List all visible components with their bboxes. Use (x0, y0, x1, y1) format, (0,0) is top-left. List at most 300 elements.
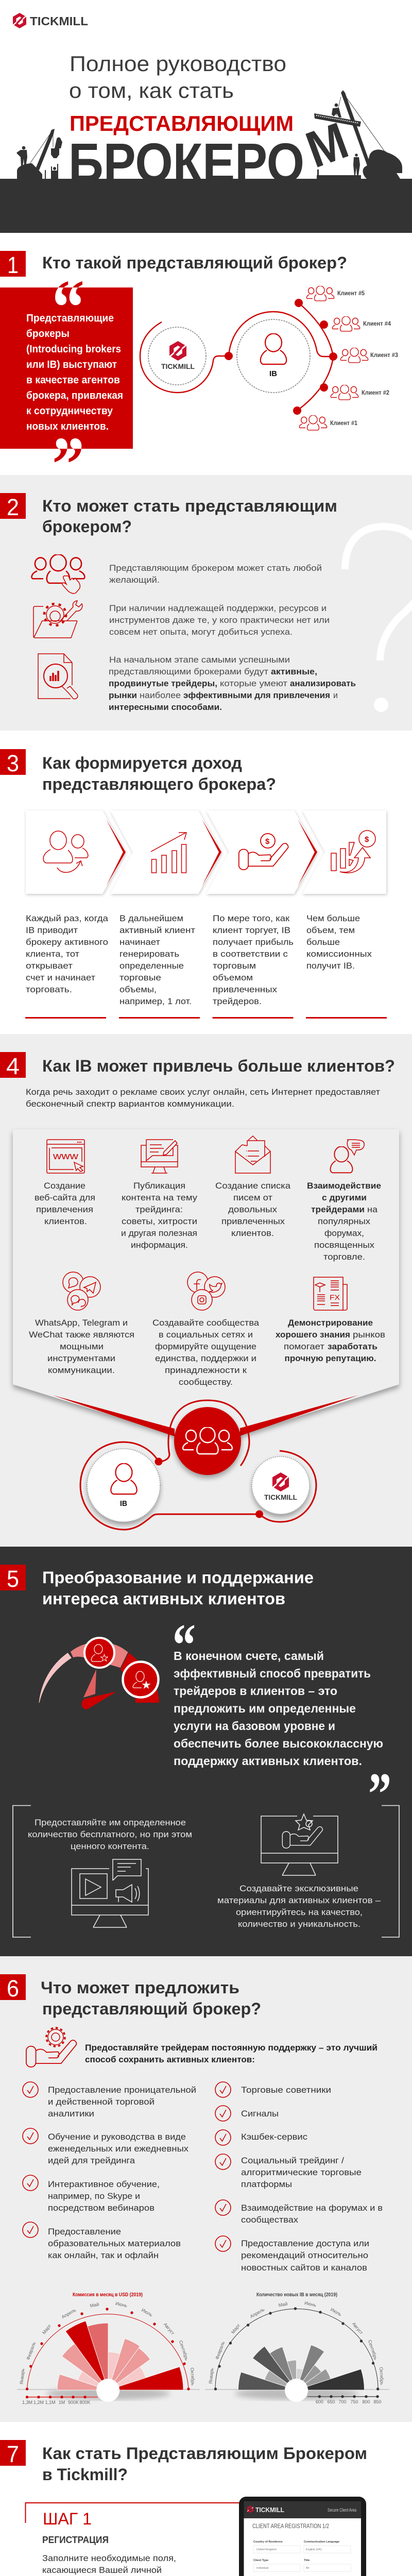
icon: email list (235, 1136, 270, 1173)
text: publishing: советы, хитрости (122, 1216, 197, 1226)
big question mark (345, 527, 412, 712)
right crane silhouette (314, 90, 402, 179)
text column 3: трейдеров. (213, 996, 262, 1006)
text column 1: торговать. (26, 985, 72, 994)
text: market knowledge: хорошего знания (276, 1330, 350, 1340)
heading 4: Как IB может привлечь больше клиентов? (42, 1057, 395, 1075)
checklist right: рекомендаций относительно (241, 2250, 368, 2260)
heading 5: 5 (7, 1566, 19, 1592)
title: Полное руководство (70, 52, 286, 76)
text column 3: в соответствии с (213, 949, 288, 959)
text: exclusive materials: ориентируйтесь на качество, (236, 1907, 363, 1917)
quote: retain traders: поддержку активных клиентов. (174, 1754, 362, 1768)
chart: commission per month: 900K (68, 2400, 79, 2405)
icon: hand with coin (239, 834, 288, 870)
checklist left: Предоставление проницательной (48, 2085, 196, 2095)
text column 1: счет и начинает (26, 973, 95, 982)
panel: definition quote: брокеры (26, 328, 70, 340)
text: email list: писем от (233, 1193, 272, 1202)
tablet: registration form: United Kingdom (256, 2548, 277, 2551)
text: market knowledge: заработать (328, 1342, 377, 1351)
diagram: clients, IB and tickmill: IB (120, 1499, 127, 1508)
text: free content: количество бесплатного, но при этом (28, 1829, 192, 1839)
diagram: tickmill, IB and clients (140, 286, 398, 430)
text: interact with traders: форумах, (324, 1228, 364, 1238)
icon: hand with gear (26, 2028, 76, 2067)
tablet: registration form: English (UK) (306, 2548, 322, 2551)
text: market knowledge: Демонстрирование (288, 1318, 373, 1328)
tablet: registration form: TICKMILL (255, 2506, 284, 2514)
text: messengers: мощными (60, 1342, 104, 1351)
chart: commission per month: Комиссия в месяц в USD (2019) (73, 2292, 143, 2298)
section 6 (0, 1956, 412, 2422)
text: interact with traders: на (367, 1205, 378, 1214)
text: interact with traders: торговле. (323, 1252, 365, 1262)
icon: bars, arrow and coin: $ (365, 835, 369, 844)
chevron cards (26, 810, 386, 894)
heading 3: представляющего брокера? (42, 775, 276, 793)
text: active advanced traders (109, 655, 356, 712)
chart: new IBs per month: 750 (350, 2399, 358, 2404)
step 1: РЕГИСТРАЦИЯ (42, 2535, 109, 2545)
text: active advanced traders: наиболее (140, 690, 181, 700)
checklist right: Взаимодействие на форумах и в (241, 2203, 383, 2213)
chart: commission per month: 1,2M (33, 2400, 44, 2405)
chart: commission per month: Сентябрь (178, 2340, 190, 2361)
intro text (26, 1087, 380, 1109)
chart: new IBs per month: 850 (373, 2399, 382, 2404)
title: о том, как стать (69, 78, 234, 103)
quote: retain traders: предложить им определенные (174, 1702, 356, 1715)
checklist right: Торговые советники (241, 2085, 331, 2095)
checklist right (215, 2082, 383, 2273)
panel: definition quote (0, 281, 133, 463)
panel: definition quote: брокера, привлекая (26, 390, 123, 401)
text: website: веб-сайта для (35, 1193, 95, 1202)
intro text: бесконечный спектр вариантов коммуникации. (26, 1099, 234, 1109)
heading 7: Как стать Представляющим Брокером (42, 2444, 367, 2463)
text: email list: Создание списка (215, 1181, 291, 1191)
text: publishing: и другая полезная (121, 1228, 197, 1238)
tablet: registration form: CLIENT AREA REGISTRATION 1/2 (252, 2522, 329, 2530)
checklist left: и действенной торговой (48, 2097, 154, 2107)
checklist left: Предоставление (48, 2227, 121, 2236)
text column 3 (212, 913, 294, 1019)
checklist left: идей для трейдинга (48, 2156, 135, 2165)
section 1 (0, 251, 398, 463)
text: social networks: формируйте ощущение (155, 1342, 256, 1351)
text: email list (215, 1181, 291, 1238)
heading 2: Кто может стать представляющим (42, 497, 337, 515)
chart: commission per month: 1M (59, 2400, 65, 2405)
text: support and tools: При наличии надлежащей поддержки, ресурсов и (109, 603, 327, 613)
diagram: tickmill, IB and clients: IB (269, 369, 277, 378)
text: email list: довольных (228, 1205, 278, 1214)
panel: definition quote: “ (52, 264, 84, 351)
text: anyone can become IB: Представляющим брокером может стать любой (109, 563, 322, 573)
text column 2: генерировать (119, 949, 179, 959)
chart: commission per month: Февраль (25, 2341, 37, 2361)
icon: social networks (187, 1272, 225, 1310)
heading 2: 2 (7, 494, 19, 520)
quote: retain traders: ” (368, 1760, 391, 1827)
text column 3: объемом (213, 973, 253, 982)
chart: new IBs per month: Количество новых IB в месяц (2019) (256, 2292, 337, 2298)
step 1: касающиеся Вашей личной (42, 2565, 162, 2575)
text column 2: объемы, (119, 985, 157, 994)
checklist left: еженедельных или ежедневных (48, 2144, 189, 2154)
checklist right: Сигналы (241, 2109, 279, 2119)
chart: commission per month: Май (90, 2302, 99, 2309)
checklist left (23, 2082, 196, 2260)
text: interact with traders: трейдерами (311, 1205, 365, 1214)
text column 3: привлеченных (213, 985, 278, 994)
text column 3: получает прибыль (213, 937, 294, 947)
quote: retain traders: “ (173, 1612, 196, 1679)
callout: support: Предоставляйте трейдерам постоянную поддержку – это лучший (85, 2043, 377, 2053)
icon: people with pointer (32, 554, 84, 594)
checklist right: сообществах (241, 2215, 299, 2225)
icon: trader with chat bubble (330, 1140, 364, 1173)
text column 4: Чем больше (306, 913, 360, 923)
text: anyone can become IB: желающий. (109, 575, 160, 585)
icon: gear and folder (33, 601, 82, 638)
text column 1: брокеру активного (26, 937, 108, 947)
text: messengers (29, 1318, 134, 1375)
panel: definition quote: ” (52, 421, 84, 509)
diagram: tickmill, IB and clients: Клиент #2 (362, 389, 389, 396)
text column 4: комиссионных (306, 949, 372, 959)
text: email list: привлеченных (221, 1216, 285, 1226)
diagram: clients, IB and tickmill: TICKMILL (264, 1493, 297, 1501)
text: exclusive materials: количество и уникальность. (238, 1919, 360, 1929)
text: active advanced traders: На начальном этапе самыми успешными (109, 655, 290, 665)
text column 1 (25, 913, 109, 1019)
checklist right: Социальный трейдинг / (241, 2156, 344, 2165)
icon: monitor with media (72, 1859, 148, 1927)
title: ПРЕДСТАВЛЯЮЩИМ (70, 111, 294, 135)
chart: new IBs per month: 600 (316, 2399, 323, 2404)
gauge with client icons (39, 1638, 159, 1709)
checklist left: как онлайн, так и офлайн (48, 2250, 159, 2260)
diagram: tickmill, IB and clients: Клиент #1 (330, 419, 357, 427)
panel: definition quote: или IB) выступают (26, 359, 117, 370)
heading 6: 6 (7, 1975, 19, 2002)
icon: website (47, 1140, 84, 1173)
text: messengers: коммуникации. (48, 1365, 115, 1375)
quote: retain traders (173, 1612, 391, 1827)
title: БРОКЕРО (68, 131, 304, 194)
chart: new IBs per month: Апрель (249, 2307, 265, 2319)
icon: report under magnifier (38, 654, 78, 699)
heading 6: представляющий брокер? (42, 1999, 261, 2018)
title (68, 52, 355, 194)
text column 2: начинает (119, 937, 160, 947)
heading 4: 4 (6, 1053, 20, 1079)
icon: messengers (63, 1272, 100, 1310)
text column 1: открывает (26, 961, 73, 971)
title: М (299, 111, 355, 179)
heading 5: интереса активных клиентов (42, 1589, 285, 1608)
checklist right: новостных сайтов и каналов (241, 2263, 367, 2273)
panel background (0, 475, 412, 731)
text: exclusive materials: материалы для активных клиентов – (217, 1895, 381, 1905)
checklist left: образовательных материалов (48, 2239, 181, 2248)
diagram: tickmill, IB and clients: Клиент #4 (363, 320, 391, 327)
checklist left: аналитики (48, 2109, 94, 2119)
icon: website: www (53, 1151, 79, 1161)
panel: definition quote: к сотрудничеству (26, 405, 113, 417)
chart: commission per month (17, 2292, 200, 2405)
text column 3: клиент торгует, IB (213, 925, 290, 935)
panel background (0, 1956, 412, 2422)
text: social networks: в социальных сетях и (159, 1330, 253, 1340)
tablet: registration form: Client Type (253, 2559, 268, 2562)
chart: commission per month: Июнь (115, 2301, 128, 2308)
text: active advanced traders: активные, (271, 667, 317, 676)
icon: hand with coin: $ (265, 837, 270, 846)
ground (0, 179, 412, 233)
text column 2: активный клиент (119, 925, 195, 935)
chart: commission per month: Январь (19, 2368, 25, 2385)
tablet: registration form: Communication Language (304, 2540, 339, 2544)
icon: fx newspaper: FX (330, 1293, 340, 1301)
chart: commission per month: 1,1M (45, 2400, 56, 2405)
checklist left: посредством вебинаров (48, 2203, 154, 2213)
text: email list: клиентов. (231, 1228, 274, 1238)
text: market knowledge (276, 1318, 385, 1363)
gauge with client icons: ★ (100, 1654, 108, 1663)
text: social networks: сообществу. (179, 1377, 233, 1387)
text: anyone can become IB (109, 563, 322, 585)
heading 7: в Tickmill? (42, 2465, 128, 2484)
callout: support: способ сохранить активных клиентов: (85, 2055, 255, 2064)
icon: two clients (43, 831, 88, 872)
text: website: клиентов. (44, 1216, 87, 1226)
logo (12, 13, 88, 28)
text: active advanced traders: продвинутые трейдеры, (109, 679, 217, 688)
chart: new IBs per month: Май (278, 2301, 288, 2308)
tablet: registration form: Title (304, 2559, 310, 2562)
panel: definition quote: “ (52, 264, 84, 351)
heading 6: Что может предложить (41, 1978, 239, 1997)
text: active advanced traders: представляющими брокерами будут (109, 667, 268, 676)
heading 5 (0, 1565, 314, 1608)
chart: commission per month: 1,3M (22, 2400, 32, 2405)
text: social networks (152, 1318, 260, 1387)
text: market knowledge: помогает (284, 1342, 324, 1351)
left crane silhouette (16, 129, 62, 179)
text: publishing: информация. (131, 1240, 188, 1250)
checklist left: Обучение и руководства в виде (48, 2132, 186, 2142)
quote: retain traders: трейдеров в клиентов – это (174, 1684, 337, 1698)
heading 5: Преобразование и поддержание (42, 1568, 314, 1587)
section 4 (0, 1034, 412, 1547)
tablet: registration form: Country of Residence (253, 2540, 283, 2544)
chart: commission per month: Октябрь (190, 2367, 196, 2386)
text column 1: Каждый раз, когда (26, 913, 109, 923)
heading 2: брокером? (42, 517, 132, 536)
text column 2: торговые (119, 973, 161, 982)
chart: new IBs per month: Июнь (304, 2300, 317, 2308)
text: market knowledge: рынков (353, 1330, 385, 1340)
chart: new IBs per month: Июль (330, 2307, 342, 2317)
heading 6 (0, 1974, 261, 2018)
text: messengers: WeChat также являются (29, 1330, 134, 1340)
text column 2: В дальнейшем (119, 913, 183, 923)
gauge with client icons: ★ (142, 1680, 151, 1690)
text: website: Создание (44, 1181, 85, 1191)
checklist left: Интерактивное обучение, (48, 2179, 160, 2189)
icon: monitor with award hand (261, 1814, 338, 1875)
text: market knowledge: прочную репутацию. (284, 1353, 376, 1363)
text: free content (28, 1818, 192, 1851)
panel: definition quote: (Introducing brokers (26, 344, 121, 355)
text column 2: например, 1 лот. (119, 996, 192, 1006)
icon: publishing (141, 1140, 178, 1173)
heading 3 (0, 749, 276, 793)
panel background (0, 1034, 412, 1547)
chart: new IBs per month: Сентябрь (367, 2339, 379, 2361)
text column 4: больше (306, 937, 340, 947)
heading 3: Как формируется доход (42, 754, 242, 772)
chart: new IBs per month: Январь (208, 2368, 214, 2384)
icon: bars, arrow and coin (331, 831, 375, 873)
chart: new IBs per month: 650 (327, 2399, 335, 2404)
chart: commission per month: Март (41, 2324, 52, 2335)
header (0, 13, 412, 233)
text: exclusive materials: Создавайте эксклюзивные (239, 1884, 358, 1893)
diagram: tickmill, IB and clients: TICKMILL (161, 362, 195, 370)
tablet: registration form: Secure Client Area (328, 2507, 356, 2513)
text: messengers: инструментами (47, 1353, 115, 1363)
text: website: привлечения (36, 1205, 93, 1214)
heading 1: 1 (7, 252, 19, 278)
text: interact with traders (307, 1181, 381, 1262)
chart: new IBs per month: Март (230, 2323, 241, 2335)
tablet: registration form: Mr (306, 2567, 310, 2570)
text: support and tools: инструментов даже те, у кого практически нет или (109, 615, 330, 625)
text column 2 (119, 913, 200, 1019)
chart: commission per month: Август (163, 2321, 176, 2336)
icon: growing bars (151, 833, 186, 873)
quote: retain traders: услуги на базовом уровне и (174, 1719, 335, 1733)
section 3 (0, 749, 387, 1019)
text column 4: объем, тем (306, 925, 355, 935)
checklist right: Предоставление доступа или (241, 2239, 369, 2248)
step 1: Заполните необходимые поля, (42, 2553, 176, 2563)
chart: new IBs per month: Октябрь (379, 2367, 385, 2385)
text column 2: определенные (119, 961, 184, 971)
panel: definition quote: в качестве агентов (26, 375, 120, 386)
chart: commission per month: Апрель (61, 2307, 77, 2319)
text: publishing (121, 1181, 198, 1250)
checklist right: алгоритмические торговые (241, 2167, 362, 2177)
panel background (0, 1547, 412, 1956)
text: publishing: трейдинга: (135, 1205, 183, 1214)
text: support and tools: совсем нет опыта, могут добиться успеха. (109, 627, 293, 637)
intro text: Когда речь заходит о рекламе своих услуг онлайн, сеть Интернет предоставляет (26, 1087, 380, 1097)
heading 7 (0, 2440, 367, 2484)
text: active advanced traders: и (333, 690, 338, 700)
heading 1 (0, 251, 347, 278)
text: publishing: Публикация (133, 1181, 185, 1191)
section 2 (0, 475, 412, 731)
callout: support (85, 2043, 377, 2064)
quote: retain traders: обеспечить более высококлассную (174, 1737, 383, 1750)
panel: definition quote: новых клиентов. (26, 421, 109, 432)
text: interact with traders: с другими (322, 1193, 367, 1202)
step 1 (26, 2503, 240, 2576)
step 1: ШАГ 1 (43, 2510, 92, 2528)
text: publishing: контента на тему (122, 1193, 198, 1202)
text column 1: IB приводит (26, 925, 78, 935)
text column 3: По мере того, как (213, 913, 290, 923)
quote: retain traders: эффективный способ превратить (174, 1667, 371, 1680)
text: support and tools (109, 603, 330, 637)
text: website (35, 1181, 95, 1226)
heading 2 (0, 493, 337, 536)
text: active advanced traders: которые умеют (220, 679, 287, 688)
text column 4: получит IB. (306, 961, 355, 971)
text: active advanced traders: эффективными для привлечения (183, 690, 330, 700)
panel: ways to attract clients (13, 1129, 399, 1445)
text: social networks: принадлежности к (165, 1365, 247, 1375)
tablet: registration form: Individual (256, 2567, 268, 2570)
diagram: clients, IB and tickmill (80, 1400, 316, 1530)
chart: new IBs per month (205, 2292, 389, 2404)
section 5 (0, 1547, 412, 1956)
text: social networks: единства, поддержки и (155, 1353, 256, 1363)
chart: new IBs per month: 800 (362, 2399, 370, 2404)
panel: definition quote: Представляющие (26, 313, 114, 324)
text column 3: торговым (213, 961, 256, 971)
panel: definition quote: ” (52, 421, 84, 509)
chart: commission per month: 800K (79, 2400, 91, 2405)
quote: retain traders: В конечном счете, самый (174, 1649, 324, 1663)
text column 1: клиента, тот (26, 949, 79, 959)
heading 1: Кто такой представляющий брокер? (42, 253, 347, 272)
text: free content: Предоставляйте им определенное (35, 1818, 186, 1827)
chart: new IBs per month: Февраль (214, 2341, 226, 2360)
text: social networks: Создавайте сообщества (152, 1318, 260, 1328)
text: interact with traders: Взаимодействие (307, 1181, 381, 1191)
frame brackets (13, 1805, 399, 1937)
text: free content: ценного контента. (71, 1841, 149, 1851)
checklist right: Кэшбек-сервис (241, 2132, 308, 2142)
chart: new IBs per month: 700 (338, 2399, 347, 2404)
text: messengers: WhatsApp, Telegram и (35, 1318, 128, 1328)
heading 7: 7 (7, 2441, 19, 2467)
chart: new IBs per month: Август (351, 2321, 364, 2335)
text column 4 (306, 913, 387, 1019)
heading 3: 3 (7, 750, 19, 776)
section 7 (0, 2440, 386, 2576)
checklist left: например, по Skype и (48, 2191, 140, 2201)
tablet: registration form (239, 2497, 366, 2576)
text: interact with traders: популярных (318, 1216, 371, 1226)
diagram: tickmill, IB and clients: Клиент #3 (370, 351, 398, 359)
diagram: tickmill, IB and clients: Клиент #5 (337, 290, 365, 297)
chart: commission per month: Июль (141, 2307, 153, 2318)
text: interact with traders: посвященных (314, 1240, 375, 1250)
text: active advanced traders: анализировать (290, 679, 356, 688)
text: active advanced traders: рынки (109, 690, 137, 700)
text: active advanced traders: интересными способами. (109, 702, 222, 712)
text: exclusive materials (217, 1884, 381, 1929)
icon: fx newspaper (314, 1277, 347, 1310)
logo: TICKMILL (30, 14, 88, 28)
